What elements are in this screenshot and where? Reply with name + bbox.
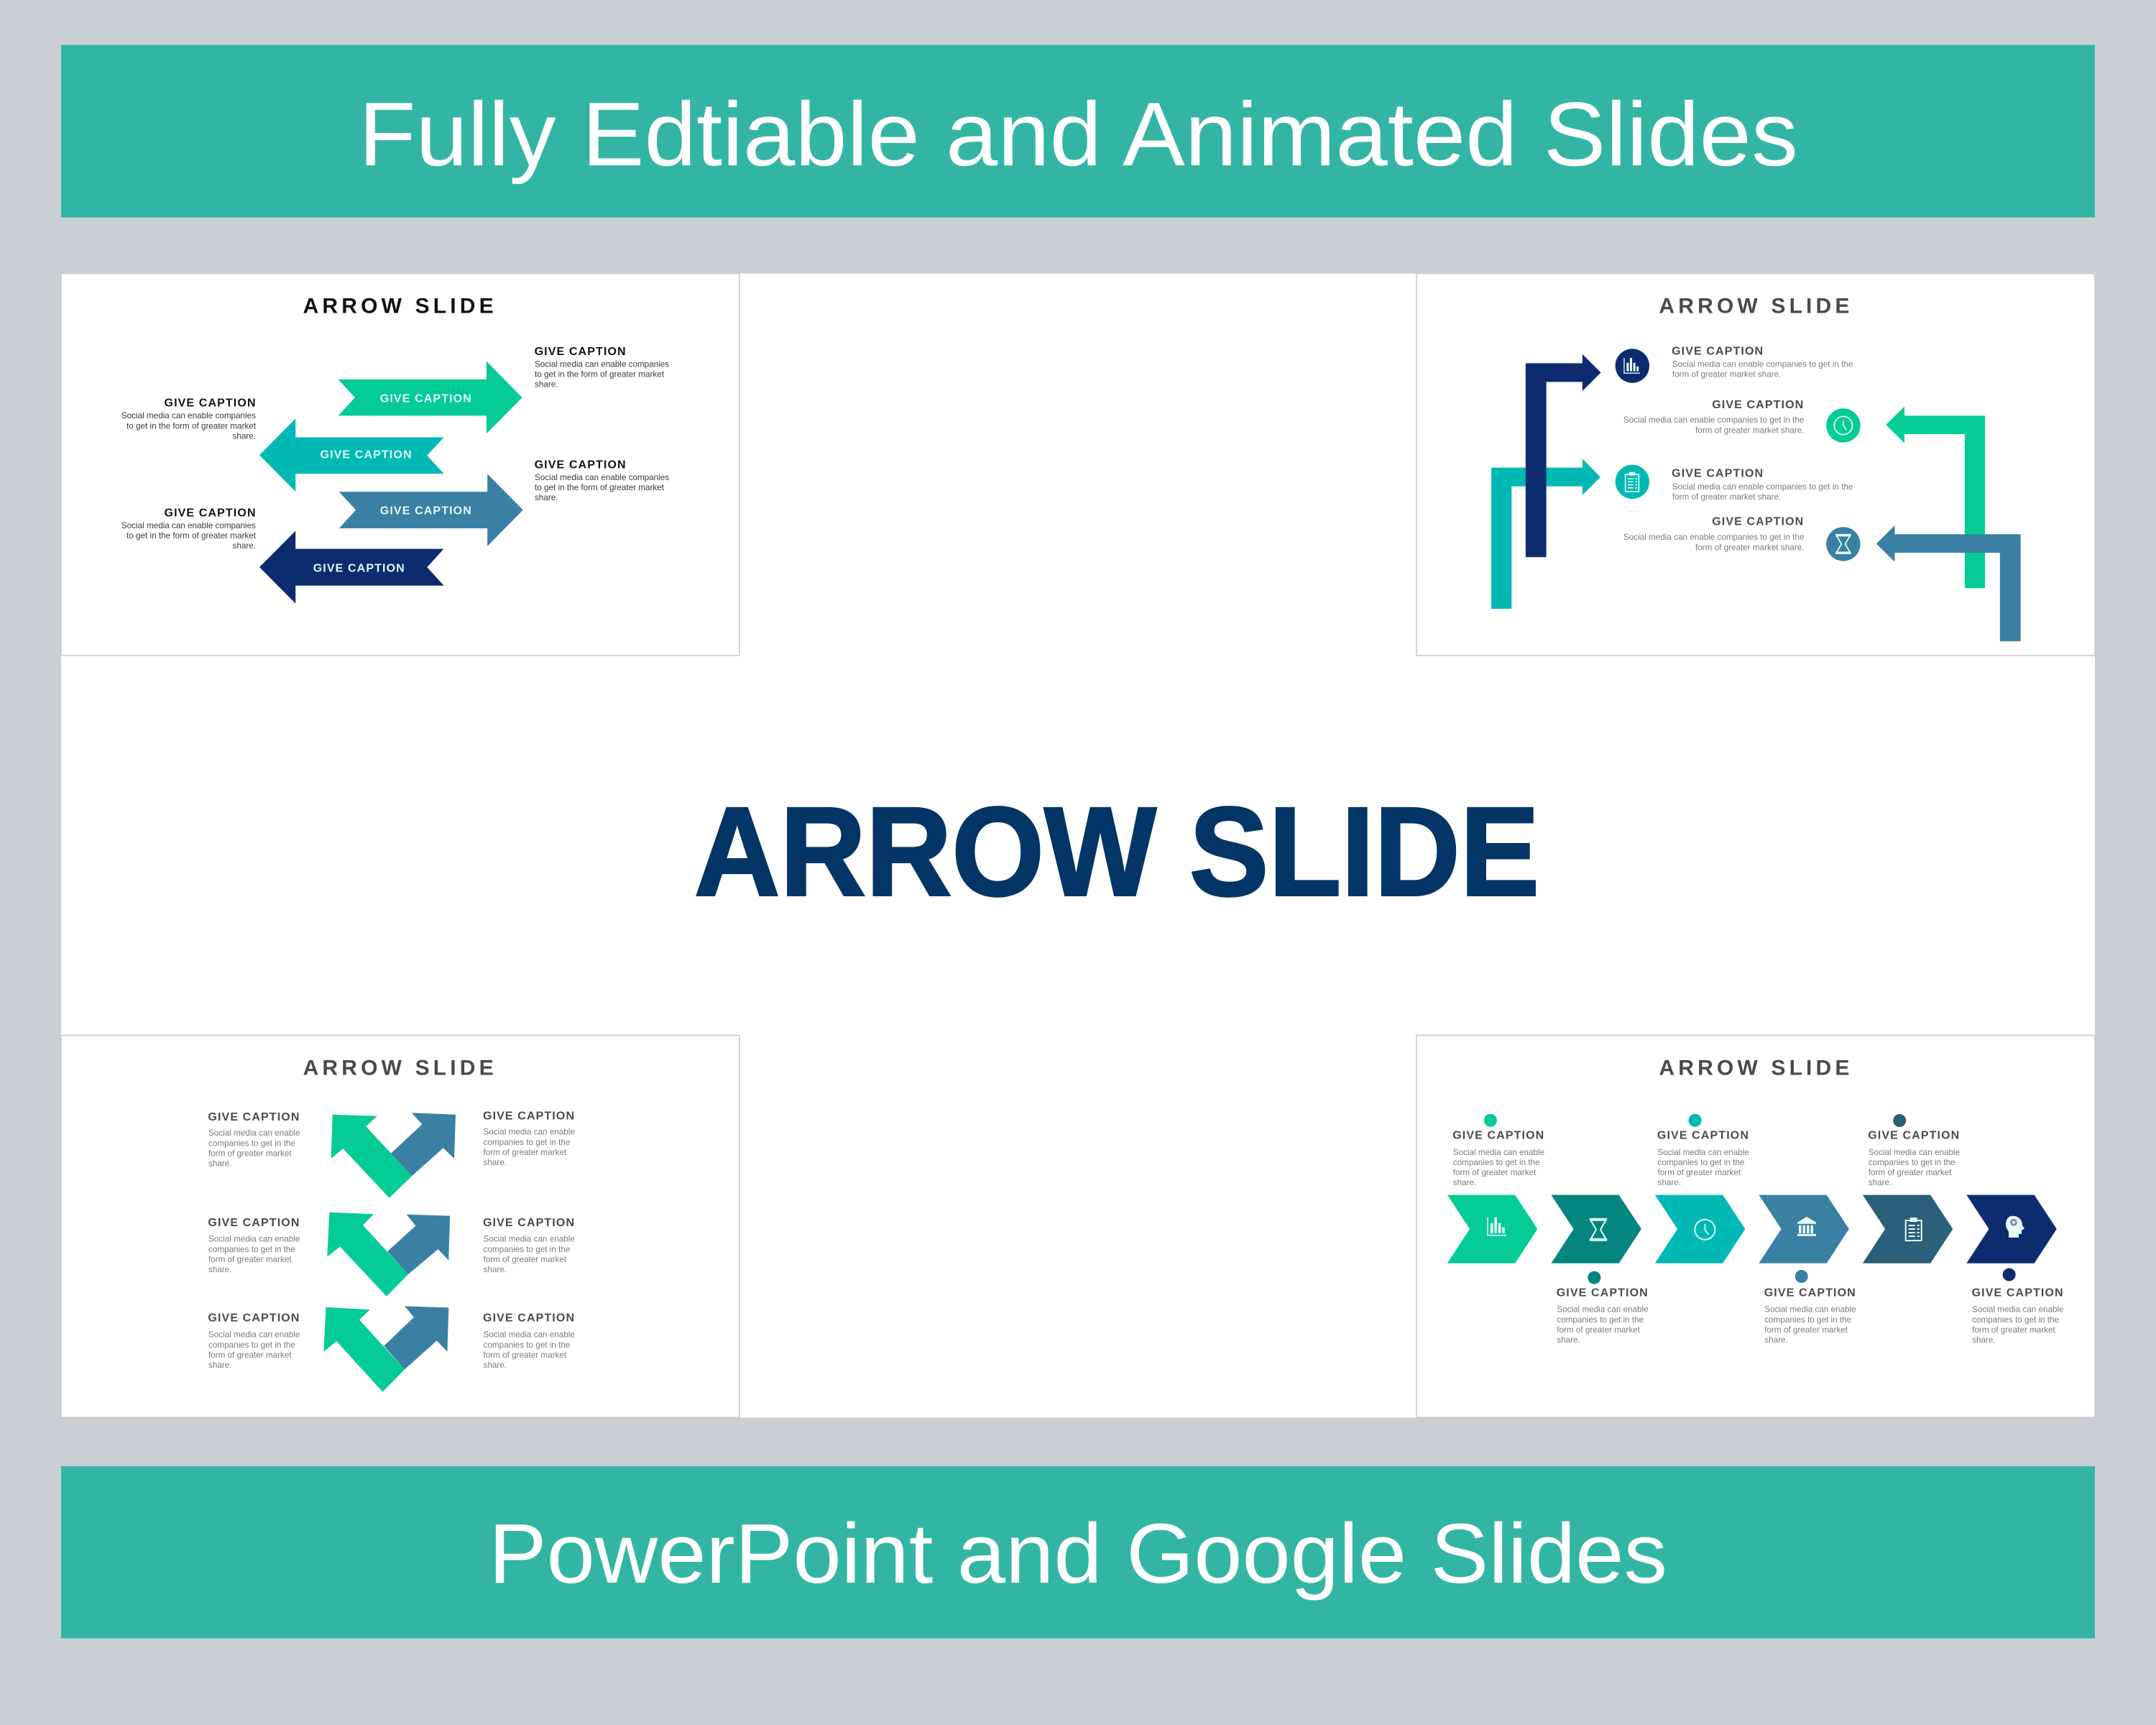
dot 5 bbox=[1893, 1114, 1906, 1127]
caption: right 2: Social media can enable companies bbox=[535, 473, 669, 482]
caption: right row 2: GIVE CAPTION bbox=[483, 1217, 574, 1229]
caption: step 2: companies to get in the bbox=[1557, 1315, 1644, 1325]
central white panel bbox=[61, 273, 2095, 1417]
caption: left row 3: Social media can enable bbox=[208, 1330, 300, 1339]
main title: ARROW SLIDE bbox=[694, 782, 1539, 923]
caption: step 6: GIVE CAPTION bbox=[1972, 1287, 2063, 1300]
caption: step 5: GIVE CAPTION bbox=[1868, 1130, 1959, 1142]
caption: left 1: to get in the form of greater market bbox=[126, 422, 257, 431]
caption: left row 1: Social media can enable bbox=[208, 1128, 300, 1138]
caption: step 2 bbox=[1557, 1287, 1649, 1345]
caption: step 4: form of greater market bbox=[1764, 1325, 1848, 1335]
dot 4 bbox=[1795, 1270, 1808, 1283]
arrow: blue right bbox=[339, 474, 523, 546]
caption: right row 3: GIVE CAPTION bbox=[483, 1312, 574, 1325]
caption: left 2: GIVE CAPTION bbox=[164, 507, 256, 519]
caption: right 1: Social media can enable companies bbox=[535, 359, 669, 369]
caption: right row 2: share. bbox=[483, 1265, 507, 1274]
caption: right 1: GIVE CAPTION bbox=[535, 346, 626, 358]
panel: V arrows bbox=[61, 1035, 740, 1417]
caption: right 2: GIVE CAPTION bbox=[535, 459, 626, 472]
V arrow pair 2 bbox=[327, 1213, 450, 1297]
caption: step 2: GIVE CAPTION bbox=[1557, 1287, 1648, 1300]
caption: step 2: form of greater market bbox=[1557, 1325, 1641, 1335]
caption: right row 1: Social media can enable bbox=[483, 1128, 575, 1137]
arrow: teal elbow bbox=[1491, 459, 1600, 609]
caption 2: form of greater market share. bbox=[1695, 426, 1804, 436]
caption: left row 3: form of greater market bbox=[208, 1351, 292, 1360]
V arrow pair 1 bbox=[331, 1113, 456, 1198]
caption: right row 2: form of greater market bbox=[483, 1255, 567, 1264]
dot 3 bbox=[1689, 1114, 1702, 1127]
caption 3: GIVE CAPTION bbox=[1672, 467, 1763, 479]
caption: left 2: share. bbox=[233, 541, 256, 551]
caption: step 1: GIVE CAPTION bbox=[1452, 1130, 1544, 1142]
chevron 6: head bbox=[1966, 1195, 2057, 1264]
caption: left 1: Social media can enable companies bbox=[121, 411, 256, 420]
caption: left row 3 bbox=[208, 1312, 300, 1370]
arrow: green right: GIVE CAPTION bbox=[380, 392, 471, 405]
caption: left row 1 bbox=[208, 1111, 300, 1169]
caption: step 6: Social media can enable bbox=[1972, 1305, 2064, 1315]
top banner bbox=[61, 45, 2095, 217]
icon: clock badge bbox=[1826, 408, 1861, 443]
top banner: Fully Edtiable and Animated Slides bbox=[359, 83, 1798, 185]
caption 2: GIVE CAPTION bbox=[1712, 399, 1803, 411]
bottom banner bbox=[61, 1466, 2095, 1639]
caption: left 2: Social media can enable companies bbox=[121, 521, 256, 530]
arrow: teal left: GIVE CAPTION bbox=[321, 448, 411, 461]
caption: right 1 bbox=[535, 346, 669, 390]
caption: left row 2: Social media can enable bbox=[208, 1235, 300, 1243]
chevron 4: bank bbox=[1759, 1195, 1849, 1264]
caption: right 1: to get in the form of greater market bbox=[535, 370, 665, 380]
caption: step 4 bbox=[1764, 1287, 1856, 1345]
arrow: teal left bbox=[259, 419, 444, 492]
caption: step 5: companies to get in the bbox=[1869, 1158, 1955, 1167]
caption: step 1: share. bbox=[1453, 1178, 1476, 1187]
caption: step 5: form of greater market bbox=[1869, 1168, 1952, 1177]
caption: right row 2: Social media can enable bbox=[483, 1235, 575, 1243]
caption: right row 1 bbox=[483, 1110, 575, 1167]
caption: left row 3: GIVE CAPTION bbox=[208, 1312, 299, 1325]
caption 3 bbox=[1672, 467, 1853, 502]
caption: left row 1: form of greater market bbox=[208, 1149, 292, 1159]
caption: right row 1: share. bbox=[483, 1158, 507, 1167]
panel: chevron process bbox=[1416, 1035, 2095, 1417]
caption: step 3: share. bbox=[1657, 1178, 1681, 1187]
caption: right 2: share. bbox=[535, 493, 558, 502]
caption: right row 3: companies to get in the bbox=[483, 1340, 570, 1350]
caption: step 1: Social media can enable bbox=[1453, 1148, 1544, 1157]
caption: left 1 bbox=[121, 397, 257, 441]
slide title: ARROW SLIDE bbox=[1659, 295, 1849, 318]
caption: step 3: form of greater market bbox=[1657, 1168, 1741, 1177]
caption: left row 3: companies to get in the bbox=[208, 1340, 295, 1350]
caption: step 5: share. bbox=[1869, 1178, 1892, 1187]
caption: step 4: Social media can enable bbox=[1764, 1305, 1856, 1315]
caption: step 6: form of greater market bbox=[1972, 1325, 2056, 1335]
arrow: green elbow bbox=[1886, 407, 1985, 588]
caption: left row 2 bbox=[208, 1217, 300, 1274]
caption: right row 2: companies to get in the bbox=[483, 1245, 570, 1254]
icon: hourglass badge bbox=[1826, 527, 1861, 561]
caption: right row 1: form of greater market bbox=[483, 1148, 567, 1157]
chevron 1: bar chart bbox=[1447, 1195, 1537, 1264]
caption: left row 2: form of greater market bbox=[208, 1255, 292, 1264]
panel: elbow arrows with icons bbox=[1416, 273, 2095, 656]
caption: step 4: GIVE CAPTION bbox=[1764, 1287, 1856, 1300]
dot 6 bbox=[2003, 1268, 2016, 1281]
dot 1 bbox=[1484, 1114, 1497, 1127]
slide title: ARROW SLIDE bbox=[1659, 1057, 1849, 1080]
caption: right 2 bbox=[535, 459, 669, 502]
caption 1: Social media can enable companies to get in the bbox=[1672, 359, 1853, 369]
caption: right row 3: share. bbox=[483, 1361, 507, 1370]
chevron 3: clock bbox=[1655, 1195, 1745, 1264]
caption: right row 1: GIVE CAPTION bbox=[483, 1110, 574, 1123]
slide title: ARROW SLIDE bbox=[303, 295, 494, 318]
arrow: navy elbow bbox=[1526, 354, 1601, 557]
icon: clipboard badge bbox=[1616, 465, 1649, 499]
caption 2: Social media can enable companies to get in the bbox=[1623, 415, 1804, 425]
caption: step 6: companies to get in the bbox=[1972, 1315, 2059, 1325]
caption: step 3 bbox=[1657, 1130, 1749, 1187]
caption: step 2: Social media can enable bbox=[1557, 1305, 1649, 1315]
dot 2 bbox=[1588, 1271, 1600, 1284]
caption 1 bbox=[1672, 345, 1853, 380]
caption: left row 1: GIVE CAPTION bbox=[208, 1111, 299, 1123]
caption: step 3: Social media can enable bbox=[1657, 1148, 1749, 1157]
caption: right row 1: companies to get in the bbox=[483, 1138, 570, 1147]
arrow: navy left bbox=[259, 531, 444, 604]
bottom banner: PowerPoint and Google Slides bbox=[489, 1506, 1667, 1601]
caption: step 1: form of greater market bbox=[1453, 1168, 1537, 1177]
caption 3: Social media can enable companies to get in the bbox=[1672, 482, 1853, 492]
caption: right row 2 bbox=[483, 1217, 575, 1274]
caption 1: form of greater market share. bbox=[1672, 370, 1781, 380]
caption: step 5: Social media can enable bbox=[1869, 1148, 1960, 1157]
arrow: blue right: GIVE CAPTION bbox=[380, 505, 471, 518]
caption: right row 3 bbox=[483, 1312, 575, 1370]
caption 4: GIVE CAPTION bbox=[1712, 516, 1803, 528]
caption: step 4: share. bbox=[1764, 1335, 1788, 1345]
caption: left 2 bbox=[121, 507, 257, 551]
caption: step 4: companies to get in the bbox=[1764, 1315, 1851, 1325]
caption: left row 2: share. bbox=[208, 1265, 231, 1274]
caption 1: GIVE CAPTION bbox=[1672, 345, 1763, 358]
caption: left row 3: share. bbox=[208, 1361, 231, 1370]
caption: left 2: to get in the form of greater market bbox=[126, 531, 257, 540]
V arrow pair 3 bbox=[323, 1306, 448, 1392]
caption 4: form of greater market share. bbox=[1695, 543, 1804, 552]
caption: step 5 bbox=[1868, 1130, 1960, 1187]
caption: step 6: share. bbox=[1972, 1335, 1996, 1345]
caption: step 6 bbox=[1972, 1287, 2064, 1345]
caption: left 1: share. bbox=[233, 432, 256, 441]
chevron 2: hourglass bbox=[1551, 1195, 1641, 1264]
chevron 5: clipboard bbox=[1863, 1195, 1953, 1264]
caption: right row 3: Social media can enable bbox=[483, 1330, 575, 1339]
caption 4: Social media can enable companies to get in the bbox=[1623, 533, 1804, 542]
caption: right 1: share. bbox=[535, 380, 558, 390]
panel: stacked left and right arrows bbox=[61, 273, 740, 656]
caption 2 bbox=[1623, 399, 1804, 436]
caption 4 bbox=[1623, 516, 1804, 552]
caption 3: form of greater market share. bbox=[1672, 492, 1781, 502]
slide title: ARROW SLIDE bbox=[303, 1057, 494, 1080]
caption: step 3: GIVE CAPTION bbox=[1657, 1130, 1749, 1142]
arrow: green right bbox=[338, 362, 522, 433]
caption: left row 1: share. bbox=[208, 1159, 231, 1169]
caption: left row 1: companies to get in the bbox=[208, 1138, 295, 1149]
caption: step 3: companies to get in the bbox=[1657, 1158, 1744, 1167]
caption: right row 3: form of greater market bbox=[483, 1351, 567, 1360]
arrow: navy left: GIVE CAPTION bbox=[313, 562, 405, 575]
caption: step 1: companies to get in the bbox=[1453, 1158, 1540, 1167]
caption: right 2: to get in the form of greater market bbox=[535, 483, 665, 492]
caption: step 2: share. bbox=[1557, 1335, 1580, 1345]
caption: left row 2: GIVE CAPTION bbox=[208, 1217, 299, 1229]
caption: left row 2: companies to get in the bbox=[208, 1245, 295, 1254]
caption: step 1 bbox=[1452, 1130, 1544, 1187]
icon: bar chart badge bbox=[1616, 349, 1649, 383]
arrow: blue elbow bbox=[1876, 525, 2021, 641]
caption: left 1: GIVE CAPTION bbox=[164, 397, 256, 410]
